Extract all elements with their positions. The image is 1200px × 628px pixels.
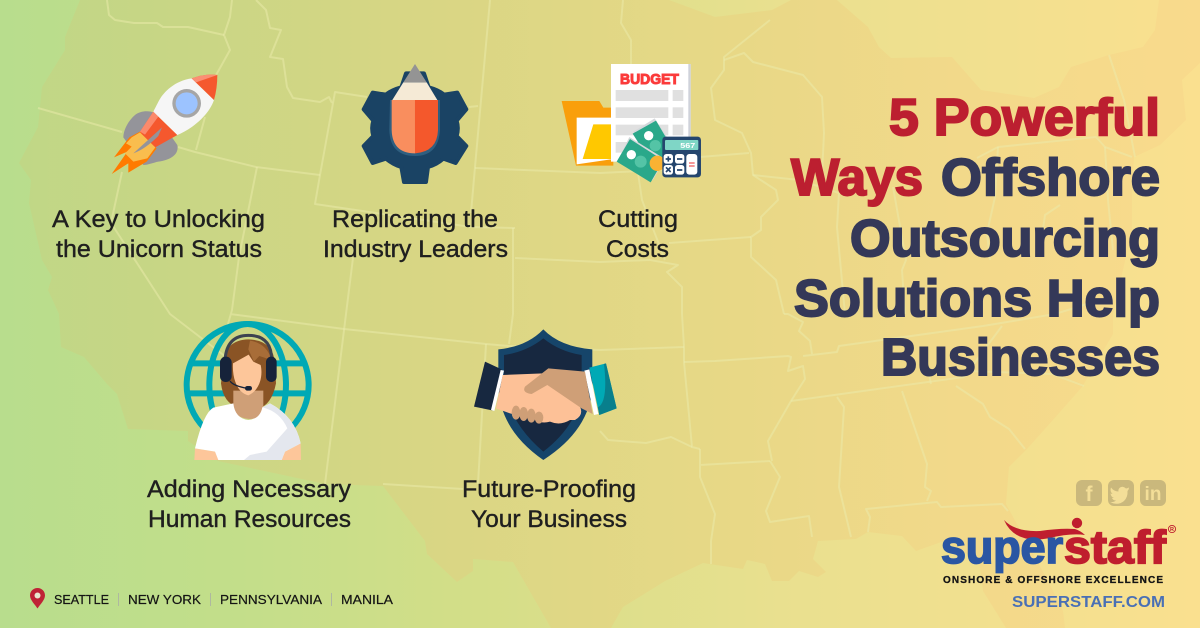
label: a key to unlocking — [52, 206, 265, 263]
label: adding necessary human resources: Adding Necessary — [147, 476, 351, 503]
logo: superstaff: R — [1170, 527, 1174, 533]
footer: office locations: MANILA — [341, 592, 393, 607]
label: cutting costs — [598, 206, 678, 263]
label: replicating the industry leaders: Industry Leaders — [323, 236, 508, 263]
icon: budget folder, money and calculator — [562, 64, 701, 182]
logo: superstaff: ONSHORE & OFFSHORE EXCELLENCE — [943, 575, 1163, 586]
social media icons: in — [1145, 484, 1161, 505]
icon: gear with pencil — [364, 64, 466, 182]
label: replicating the industry leaders — [323, 206, 508, 263]
social media icons: f — [1086, 483, 1094, 506]
label: future-proofing your business — [462, 476, 636, 533]
icon: budget folder, money and calculator: BUDGET — [620, 72, 679, 88]
icon: rocket — [112, 75, 217, 174]
title: Offshore — [941, 149, 1160, 207]
icon: handshake with shield — [474, 329, 617, 460]
title: Ways — [791, 149, 923, 207]
footer: office locations: SEATTLE — [54, 592, 109, 607]
logo: superstaff — [941, 518, 1176, 611]
title: Outsourcing — [850, 210, 1160, 268]
label: adding necessary human resources — [147, 476, 351, 533]
social media icons — [1076, 480, 1166, 506]
icon: call agent with globe — [187, 324, 309, 460]
footer: office locations: NEW YORK — [128, 592, 201, 607]
label: adding necessary human resources: Human Resources — [148, 506, 351, 533]
label: replicating the industry leaders: Replicating the — [332, 206, 498, 233]
title: Businesses — [881, 329, 1160, 387]
label: cutting costs: Costs — [606, 236, 669, 263]
label: a key to unlocking: A Key to Unlocking — [52, 206, 265, 233]
title: Solutions Help — [794, 270, 1160, 328]
label: future-proofing your business: Your Business — [471, 506, 627, 533]
label: a key to unlocking: the Unicorn Status — [56, 236, 262, 263]
logo: superstaff: super — [941, 521, 1063, 573]
logo: superstaff: SUPERSTAFF.COM — [1012, 594, 1165, 611]
label: cutting costs: Cutting — [598, 206, 678, 233]
icon: budget folder, money and calculator: 567 — [680, 141, 695, 150]
footer: office locations: PENNSYLVANIA — [220, 592, 322, 607]
logo: superstaff: staff — [1064, 521, 1167, 573]
footer: office locations — [30, 588, 393, 608]
label: future-proofing your business: Future-Proofing — [462, 476, 636, 503]
title: 5 Powerful — [889, 89, 1160, 147]
title — [791, 89, 1160, 387]
